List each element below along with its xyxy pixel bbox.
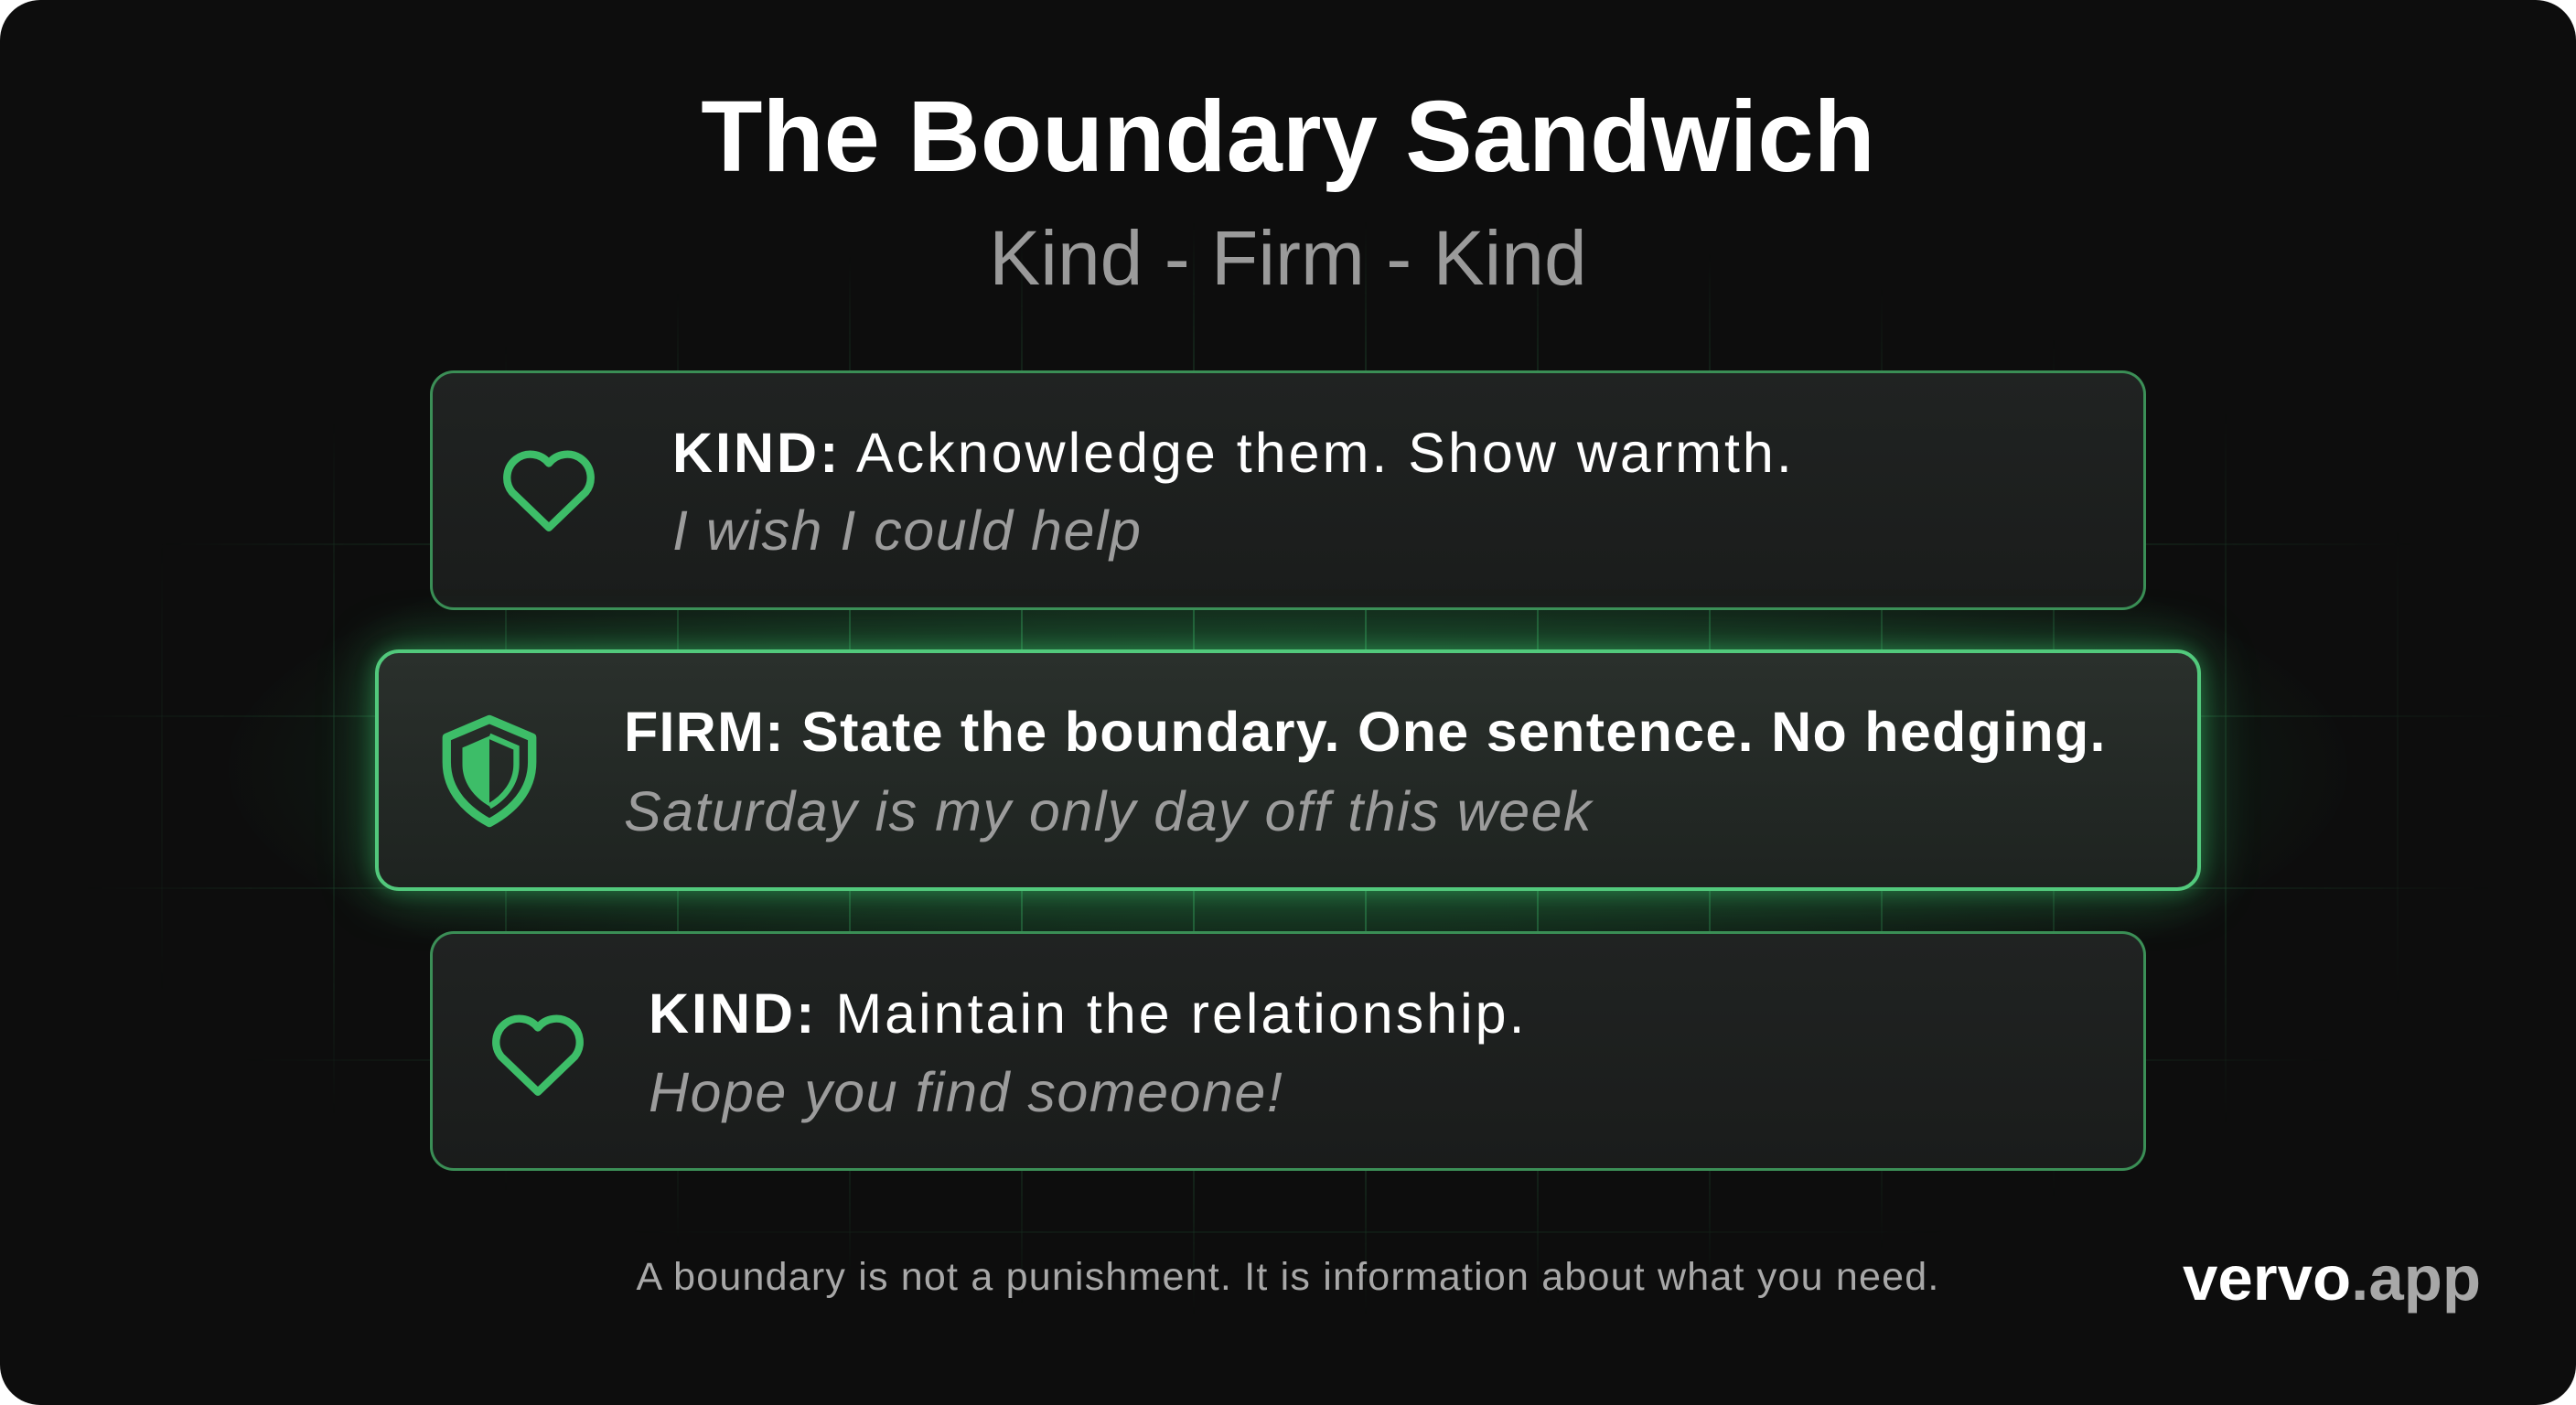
example: Saturday is my only day off this week	[624, 780, 1593, 842]
brand: vervo.app	[2183, 1243, 2481, 1314]
icon: heart	[503, 450, 595, 531]
footer note: A boundary is not a punishment. It is information about what you need.	[637, 1255, 1939, 1299]
panel: kind top	[430, 370, 2146, 610]
example: Hope you find someone!	[649, 1061, 1283, 1123]
panel: firm middle	[375, 649, 2201, 891]
heading: KIND: Acknowledge them. Show warmth.	[672, 422, 1795, 484]
title: The Boundary Sandwich	[701, 80, 1875, 193]
heading: KIND: Maintain the relationship.	[649, 982, 1528, 1045]
panel: kind bottom	[430, 931, 2146, 1171]
example: I wish I could help	[672, 499, 1142, 562]
icon: heart	[492, 1015, 584, 1096]
icon: shield	[443, 715, 536, 827]
heading: FIRM: State the boundary. One sentence. No hedging.	[624, 701, 2107, 763]
subtitle: Kind - Firm - Kind	[989, 215, 1587, 301]
